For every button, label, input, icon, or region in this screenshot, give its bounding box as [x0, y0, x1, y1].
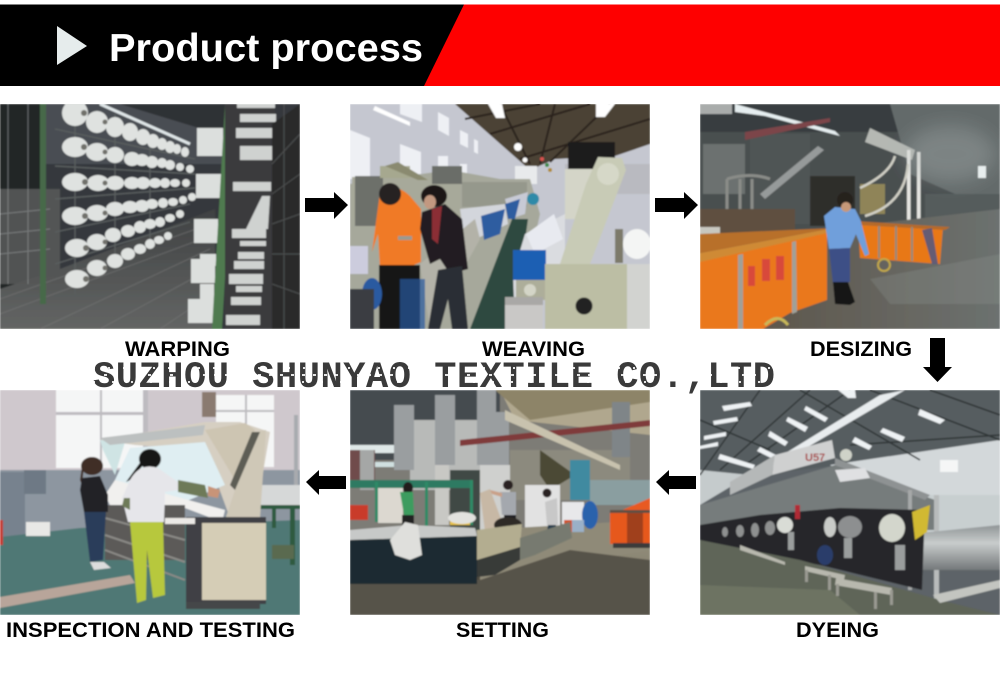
tank: [922, 524, 1000, 570]
machine row: [700, 508, 925, 590]
floor: [700, 540, 1000, 615]
far table: [258, 485, 300, 507]
worker: [824, 207, 861, 249]
red slanted band: [424, 4, 1000, 86]
icon: play triangle: [57, 26, 87, 65]
photo: dyeing: [700, 390, 1000, 615]
workers: [372, 188, 421, 269]
label: dyeing: DYEING: [796, 618, 879, 642]
watermark: company name: SUZHOU SHUNYAO TEXTILE CO.,LTD: [93, 357, 775, 399]
orange bin: [610, 512, 650, 544]
arrow: dyeing to setting: [656, 470, 696, 495]
worker in white: [139, 449, 161, 469]
arrow: desizing to dyeing: [923, 338, 952, 382]
label: warping: WARPING: [125, 337, 230, 361]
arrow: warping to weaving: [305, 192, 348, 219]
photo: inspection and testing: [0, 390, 300, 615]
arrow: weaving to desizing: [655, 192, 698, 219]
overhead gantry: [700, 465, 935, 530]
photo: desizing: [700, 104, 1000, 329]
label: weaving: WEAVING: [482, 337, 585, 361]
header banner: [0, 4, 1000, 86]
label: desizing: DESIZING: [810, 337, 912, 361]
label: inspection and testing: INSPECTION AND TESTING: [6, 618, 295, 642]
label: setting: SETTING: [456, 618, 549, 642]
worker in black: [81, 457, 103, 475]
photo: weaving: [350, 104, 651, 329]
right machine: [512, 214, 566, 298]
inspection machine: [126, 422, 270, 512]
dark fabric vats: [350, 534, 477, 584]
photo: setting: [350, 390, 650, 615]
photo: warping: [0, 100, 300, 329]
arrow: setting to inspection: [306, 470, 346, 495]
title: Product process: [109, 27, 423, 70]
photo: dyeing: U57: [805, 452, 825, 464]
